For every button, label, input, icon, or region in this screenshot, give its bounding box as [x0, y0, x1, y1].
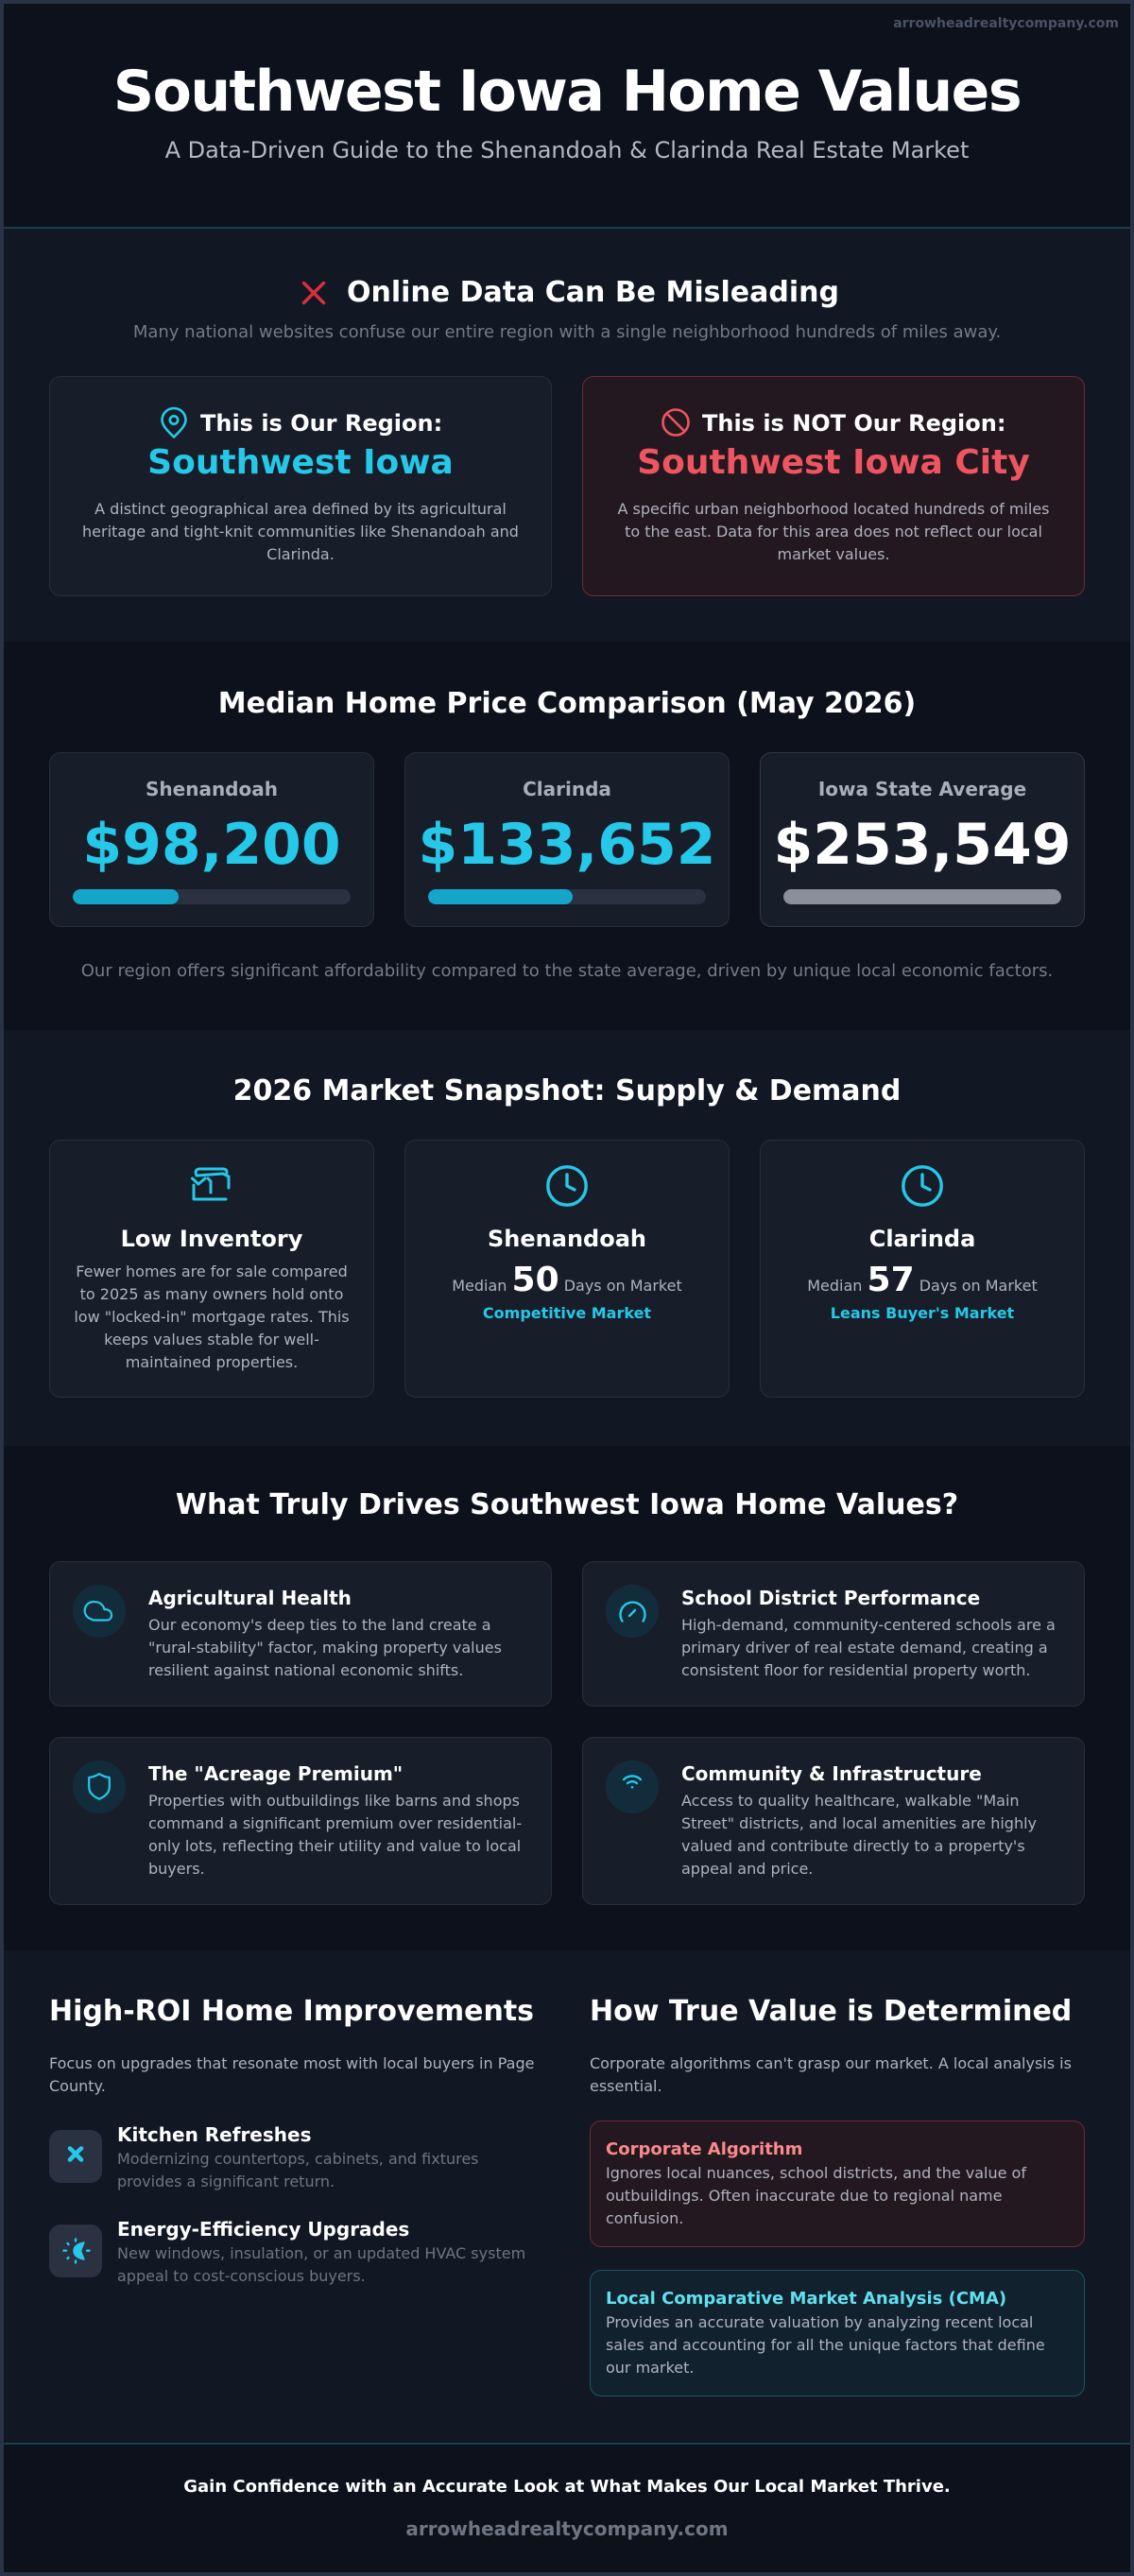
card title: Low Inventory	[121, 1226, 302, 1252]
heading: What Truly Drives Southwest Iowa Home Values?	[176, 1488, 958, 1521]
footer	[0, 2443, 1134, 2576]
market status: Competitive Market	[483, 1304, 651, 1322]
icon: open box	[191, 1168, 231, 1200]
price: $253,549	[773, 812, 1072, 878]
icon: clock	[546, 1165, 588, 1207]
factor text: resilient against national economic shifts.	[148, 1661, 463, 1679]
card text: to 2025 as many owners hold onto	[80, 1285, 343, 1303]
card text: heritage and tight-knit communities like Shenandoah and	[82, 523, 519, 541]
factor text: primary driver of real estate demand, creating a	[681, 1639, 1048, 1657]
days on market: Median 50 Days on Market	[452, 1261, 682, 1299]
panel: median home price comparison	[0, 642, 1134, 1030]
callout title: Corporate Algorithm	[606, 2139, 802, 2159]
callout text: confusion.	[606, 2209, 683, 2227]
heading: How True Value is Determined	[590, 1995, 1072, 2028]
callout: corporate algorithm	[590, 2121, 1085, 2247]
icon: location pin	[161, 406, 187, 438]
panel: bottom two columns	[0, 1950, 1134, 2443]
website watermark: arrowheadrealtycompany.com	[893, 16, 1119, 31]
label: Shenandoah	[146, 778, 278, 800]
icon: cloud	[73, 1585, 126, 1638]
label: Iowa State Average	[818, 778, 1026, 800]
market status: Leans Buyer's Market	[831, 1304, 1014, 1322]
factor: community and infrastructure	[582, 1737, 1085, 1905]
factor title: Agricultural Health	[148, 1587, 352, 1609]
card: Clarinda days on market	[760, 1140, 1085, 1398]
call to action: Gain Confidence with an Accurate Look at What Makes Our Local Market Thrive.	[183, 2477, 951, 2497]
improvement title: Energy-Efficiency Upgrades	[117, 2218, 409, 2241]
improvement text: appeal to cost-conscious buyers.	[117, 2267, 366, 2285]
icon: ban sign	[662, 408, 690, 437]
factor title: Community & Infrastructure	[681, 1762, 982, 1785]
card text	[82, 500, 519, 563]
factor text: consistent floor for residential property worth.	[681, 1661, 1030, 1679]
header	[0, 0, 1134, 229]
intro text: County.	[49, 2077, 106, 2095]
improvement title: Kitchen Refreshes	[117, 2123, 311, 2146]
card text: A specific urban neighborhood located hundreds of miles	[618, 500, 1049, 518]
factor text: appeal and price.	[681, 1860, 813, 1878]
factor text: "rural-stability" factor, making property values	[148, 1639, 502, 1657]
price card: Iowa state average	[760, 752, 1085, 927]
improvement text	[117, 2244, 525, 2285]
factor text: Properties with outbuildings like barns and shops	[148, 1792, 520, 1810]
icon: red x	[302, 282, 325, 304]
region name: Southwest Iowa City	[637, 443, 1030, 482]
icon: clock	[902, 1165, 943, 1207]
callout text: Ignores local nuances, school districts, and the value of	[606, 2164, 1026, 2182]
improvement text: Modernizing countertops, cabinets, and fixtures	[117, 2150, 479, 2168]
card title: Clarinda	[869, 1226, 975, 1252]
card heading: This is NOT Our Region:	[702, 410, 1005, 437]
factor text: command a significant premium over residential-	[148, 1814, 522, 1832]
factor text: buyers.	[148, 1860, 205, 1878]
factor text	[681, 1792, 1037, 1878]
icon: gauge	[606, 1585, 659, 1638]
column: how value is determined	[590, 1995, 1085, 2396]
card: our region	[49, 376, 552, 596]
factor text: valued and contribute directly to a property's	[681, 1837, 1025, 1855]
card text: Clarinda.	[266, 545, 335, 563]
title: Southwest Iowa Home Values	[113, 59, 1021, 125]
factor text: Our economy's deep ties to the land create a	[148, 1616, 491, 1634]
card text	[74, 1262, 350, 1371]
icon: kitchen	[49, 2130, 102, 2183]
factor title: The "Acreage Premium"	[148, 1762, 403, 1785]
callout text	[606, 2313, 1045, 2377]
callout text: our market.	[606, 2359, 694, 2377]
price: $98,200	[82, 812, 341, 878]
price card: Shenandoah	[49, 752, 374, 927]
intro text	[49, 2054, 534, 2095]
card heading: This is Our Region:	[200, 410, 442, 437]
factor title: School District Performance	[681, 1587, 980, 1609]
region name: Southwest Iowa	[147, 443, 454, 482]
callout title: Local Comparative Market Analysis (CMA)	[606, 2289, 1006, 2309]
factor: agricultural health	[49, 1561, 552, 1707]
card text: low "locked-in" mortgage rates. This	[74, 1308, 350, 1326]
price card: Clarinda	[404, 752, 730, 927]
card text: keeps values stable for well-	[104, 1331, 319, 1348]
price bar	[428, 889, 706, 904]
intro text: essential.	[590, 2077, 662, 2095]
card text: market values.	[777, 545, 890, 563]
heading: Median Home Price Comparison (May 2026)	[218, 687, 916, 720]
callout text	[606, 2164, 1026, 2227]
card text	[618, 500, 1049, 563]
improvement text	[117, 2150, 479, 2190]
card text: A distinct geographical area defined by its agricultural	[94, 500, 507, 518]
factor text: only lots, reflecting their utility and value to local	[148, 1837, 521, 1855]
callout text: Provides an accurate valuation by analyzing recent local	[606, 2313, 1033, 2331]
price: $133,652	[418, 812, 716, 878]
factor text	[148, 1792, 522, 1878]
improvement text: provides a significant return.	[117, 2172, 335, 2190]
label: Clarinda	[523, 778, 611, 800]
factor text: Access to quality healthcare, walkable "Main	[681, 1792, 1020, 1810]
factor: acreage premium	[49, 1737, 552, 1905]
icon: shield	[73, 1760, 126, 1813]
icon: energy	[49, 2224, 102, 2277]
panel: market snapshot	[0, 1030, 1134, 1446]
intro text: Focus on upgrades that resonate most with local buyers in Page	[49, 2054, 534, 2072]
card text: to the east. Data for this area does not reflect our local	[625, 523, 1042, 541]
card text: maintained properties.	[126, 1353, 298, 1371]
heading: Online Data Can Be Misleading	[347, 276, 839, 309]
intro text: Corporate algorithms can't grasp our market. A local analysis is	[590, 2054, 1072, 2072]
factor: school district performance	[582, 1561, 1085, 1707]
factor text: High-demand, community-centered schools are a	[681, 1616, 1056, 1634]
factor text	[148, 1616, 502, 1679]
callout: local CMA	[590, 2270, 1085, 2396]
comparison note: Our region offers significant affordability compared to the state average, driven by unique local economic factors.	[81, 961, 1053, 981]
card: Shenandoah days on market	[404, 1140, 730, 1398]
subtitle: A Data-Driven Guide to the Shenandoah & Clarinda Real Estate Market	[165, 137, 969, 163]
days on market: Median 57 Days on Market	[807, 1261, 1038, 1299]
improvement text: New windows, insulation, or an updated HVAC system	[117, 2244, 525, 2262]
callout text: outbuildings. Often inaccurate due to regional name	[606, 2187, 1002, 2205]
callout text: sales and accounting for all the unique factors that define	[606, 2336, 1045, 2354]
panel: what drives home values	[0, 1446, 1134, 1950]
card title: Shenandoah	[488, 1226, 646, 1252]
factor text: Street" districts, and local amenities are highly	[681, 1814, 1037, 1832]
website: arrowheadrealtycompany.com	[405, 2517, 729, 2540]
card: not our region	[582, 376, 1085, 596]
icon: wifi	[606, 1760, 659, 1813]
panel: online data can be misleading	[0, 229, 1134, 642]
card text: Fewer homes are for sale compared	[76, 1262, 348, 1280]
column: home improvements	[49, 1995, 534, 2285]
section intro: Many national websites confuse our entire region with a single neighborhood hundreds of miles away.	[133, 322, 1001, 342]
factor text	[681, 1616, 1056, 1679]
price bar	[73, 889, 351, 904]
intro text	[590, 2054, 1072, 2095]
heading: 2026 Market Snapshot: Supply & Demand	[233, 1074, 901, 1108]
heading: High-ROI Home Improvements	[49, 1995, 534, 2028]
card: low inventory	[49, 1140, 374, 1398]
price bar	[783, 889, 1061, 904]
